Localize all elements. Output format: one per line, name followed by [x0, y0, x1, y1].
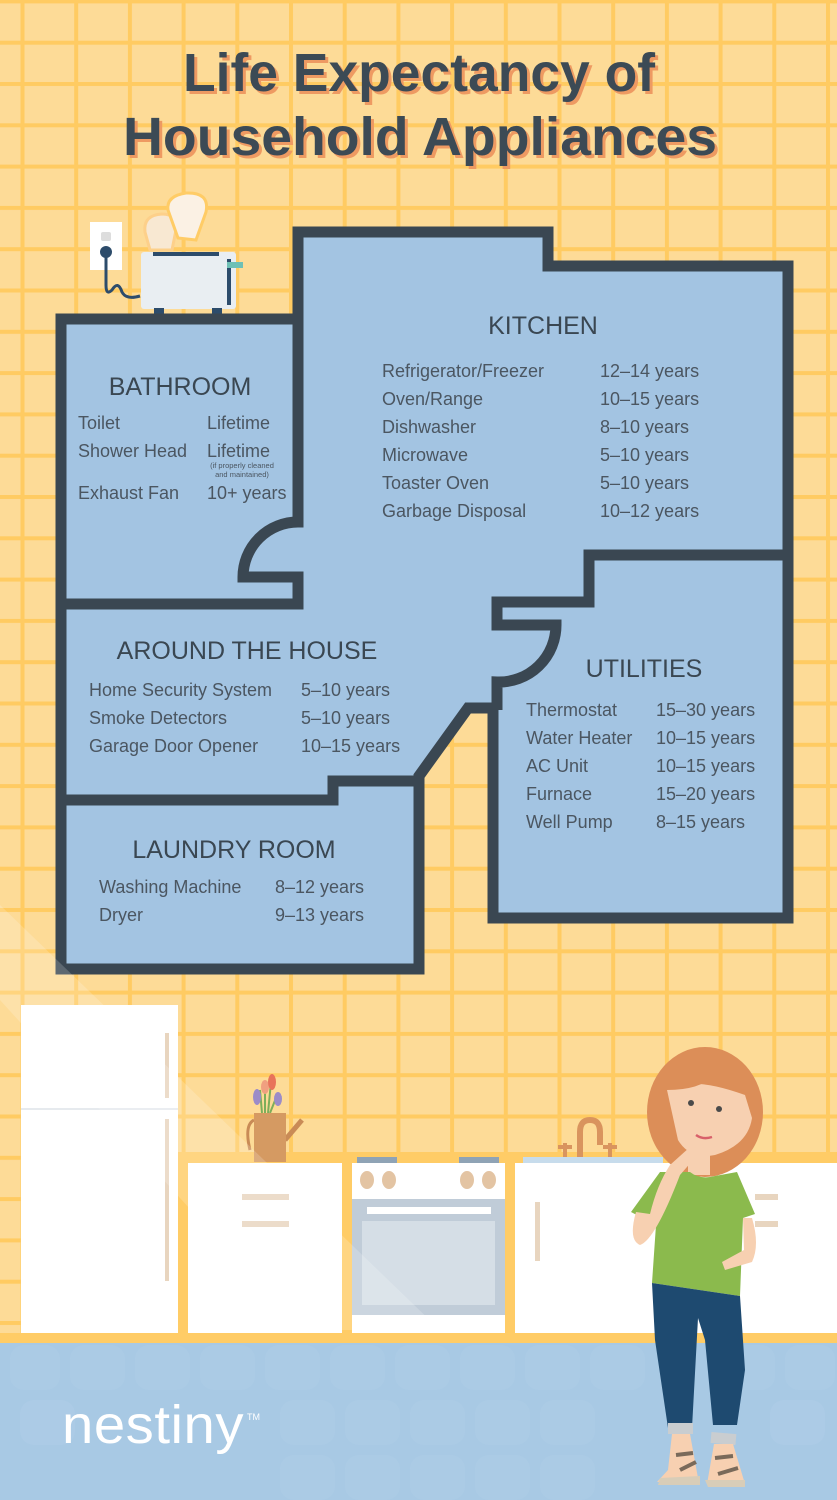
panel: around the house: 5–10 years: [301, 680, 390, 700]
panel: utilities: UTILITIES: [586, 655, 702, 683]
cuffs: [668, 1423, 693, 1434]
panel: kitchen: 12–14 years: [600, 361, 699, 381]
panel: bathroom: Exhaust Fan: [78, 483, 179, 503]
panel: around the house: Smoke Detectors: [89, 708, 227, 728]
panel: bathroom: Lifetime: [207, 441, 270, 461]
panel: kitchen: 5–10 years: [600, 445, 689, 465]
panel: around the house: [89, 637, 400, 756]
sink cabinet: [515, 1120, 837, 1333]
panel: laundry room: 8–12 years: [275, 877, 364, 897]
arm on hip: [722, 1218, 756, 1270]
light beam: [0, 905, 440, 1330]
title: Household Appliances: [123, 107, 717, 167]
panel: bathroom: (if properly cleaned: [210, 461, 274, 470]
face: [667, 1084, 752, 1156]
panel: laundry room: 9–13 years: [275, 905, 364, 925]
panel: utilities: 15–30 years: [656, 700, 755, 720]
panel: kitchen: Refrigerator/Freezer: [382, 361, 544, 381]
woman illustration: [631, 1047, 763, 1487]
panel: utilities: Furnace: [526, 784, 592, 804]
panel: bathroom: Shower Head: [78, 441, 187, 461]
logo: nestiny: nestiny: [62, 1395, 244, 1455]
panel: bathroom: Toilet: [78, 413, 120, 433]
panel: utilities: 15–20 years: [656, 784, 755, 804]
panel: kitchen: Microwave: [382, 445, 468, 465]
logo: nestiny: TM: [247, 1412, 260, 1422]
title: Household Appliances: [126, 110, 720, 170]
panel: around the house: 10–15 years: [301, 736, 400, 756]
shirt: [631, 1172, 755, 1296]
panel: kitchen: [382, 312, 699, 521]
panel: bathroom: [78, 373, 287, 503]
panel: laundry room: Washing Machine: [99, 877, 241, 897]
panel: kitchen: 10–12 years: [600, 501, 699, 521]
floor: [0, 1343, 837, 1500]
panel: bathroom: 10+ years: [207, 483, 287, 503]
panel: kitchen: 10–15 years: [600, 389, 699, 409]
title: Life Expectancy of: [186, 46, 659, 106]
panel: bathroom: Lifetime: [207, 413, 270, 433]
panel: utilities: Water Heater: [526, 728, 632, 748]
panel: kitchen: Toaster Oven: [382, 473, 489, 493]
neck: [688, 1150, 710, 1175]
panel: utilities: 8–15 years: [656, 812, 745, 832]
panel: kitchen: Oven/Range: [382, 389, 483, 409]
panel: kitchen: KITCHEN: [488, 312, 598, 340]
hair back: [647, 1047, 763, 1177]
panel: utilities: Thermostat: [526, 700, 617, 720]
stove: [352, 1157, 505, 1333]
title: Life Expectancy of: [183, 43, 656, 103]
floor plan: [61, 232, 788, 969]
panel: kitchen: 5–10 years: [600, 473, 689, 493]
panel: around the house: Home Security System: [89, 680, 272, 700]
panel: utilities: 10–15 years: [656, 756, 755, 776]
panel: around the house: Garage Door Opener: [89, 736, 258, 756]
panel: bathroom: BATHROOM: [109, 373, 251, 401]
icon: outlet and toaster: [90, 193, 243, 315]
fridge: [21, 1005, 178, 1333]
cabinet left: [188, 1163, 342, 1333]
panel: laundry room: Dryer: [99, 905, 143, 925]
kitchen scene: [0, 905, 837, 1500]
panel: around the house: AROUND THE HOUSE: [117, 637, 377, 665]
panel: utilities: 10–15 years: [656, 728, 755, 748]
panel: bathroom: and maintained): [215, 470, 269, 479]
panel: utilities: Well Pump: [526, 812, 613, 832]
panel: laundry room: LAUNDRY ROOM: [132, 836, 336, 864]
panel: laundry room: [99, 836, 364, 925]
panel: kitchen: Garbage Disposal: [382, 501, 526, 521]
panel: kitchen: 8–10 years: [600, 417, 689, 437]
icon: watering can with flowers: [248, 1074, 302, 1162]
title: [123, 43, 720, 170]
jeans: [652, 1283, 745, 1428]
arm to chin: [633, 1147, 706, 1245]
panel: utilities: AC Unit: [526, 756, 588, 776]
feet and sandals: [657, 1434, 698, 1482]
panel: around the house: 5–10 years: [301, 708, 390, 728]
panel: utilities: [526, 655, 755, 832]
panel: kitchen: Dishwasher: [382, 417, 476, 437]
